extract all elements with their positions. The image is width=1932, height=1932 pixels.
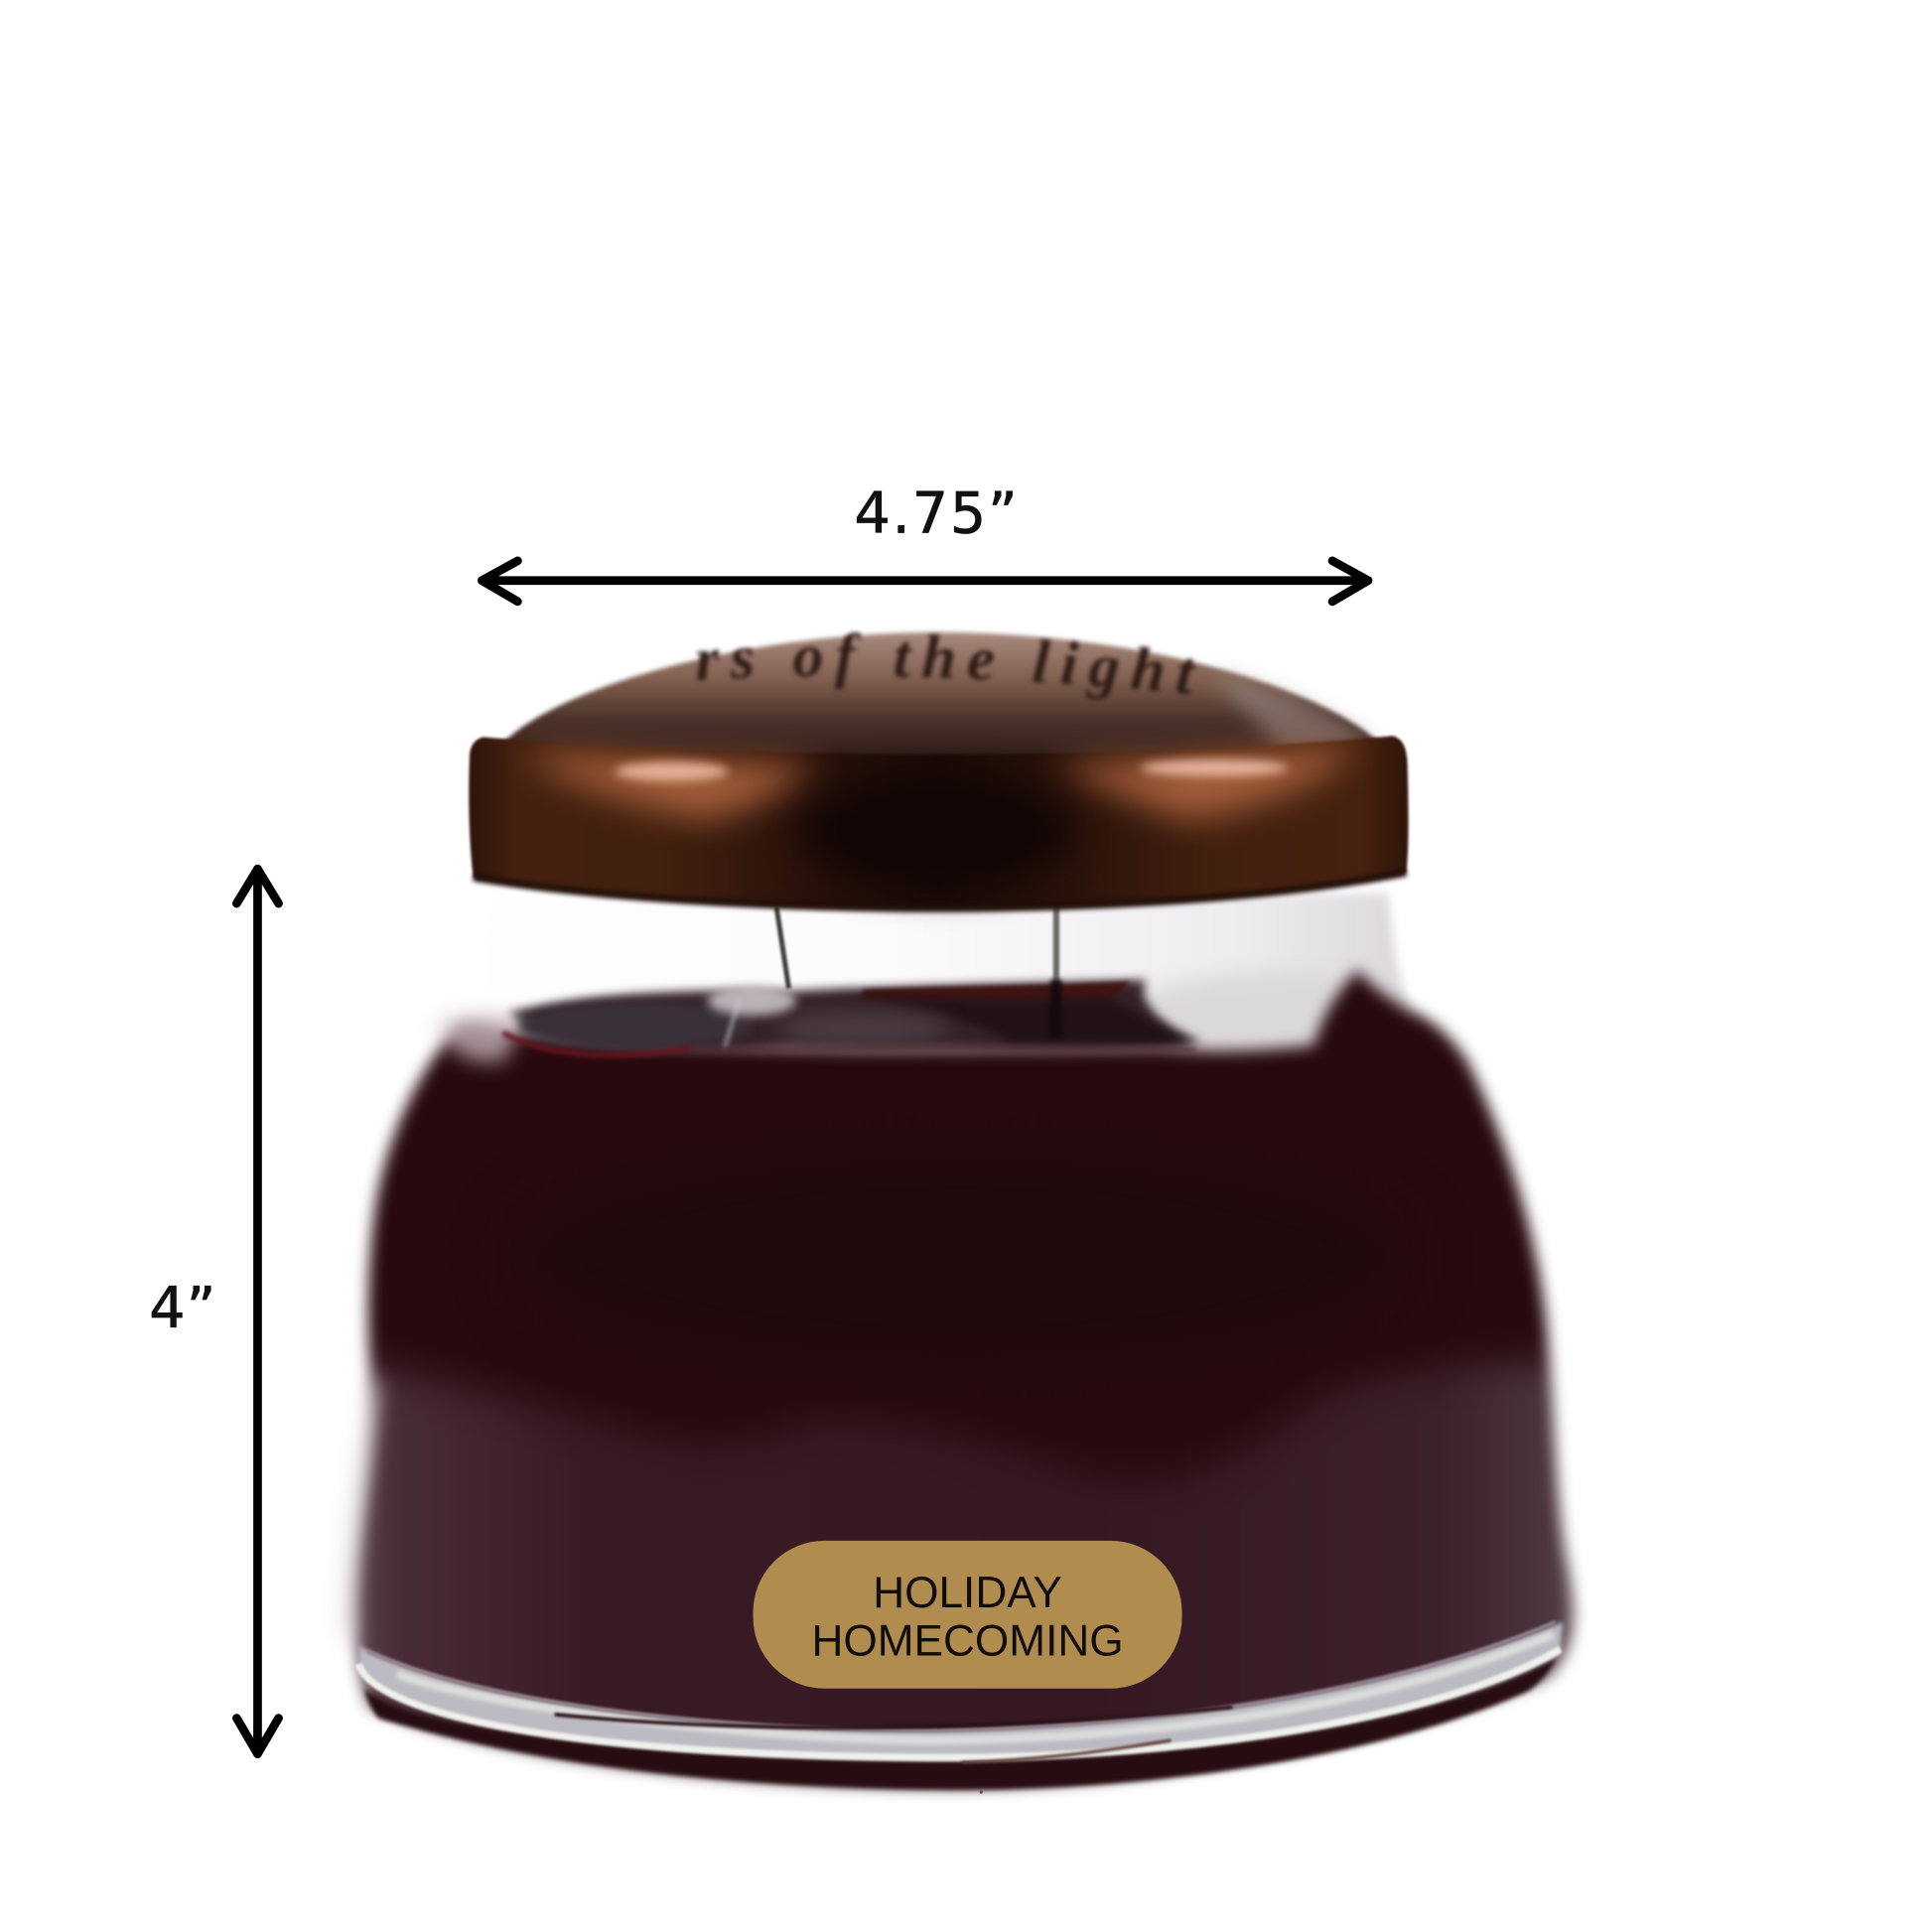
jar lid: [467, 629, 1411, 920]
wax: lower lighter layer: [344, 1331, 1585, 1799]
arrow: height dimension: [236, 869, 279, 1754]
base: outer white band: [358, 1649, 1561, 1757]
wax: upper dark layer: [321, 949, 1602, 1481]
label text: HOMECOMING: HOMECOMING: [811, 1616, 1124, 1665]
label: scent name sticker: [754, 1541, 1182, 1689]
lid: dome: [502, 629, 1378, 757]
jar: glass neck: [419, 894, 1454, 1084]
jar: glass base: [358, 1622, 1563, 1794]
wax top surface: [434, 980, 1201, 1062]
width label: 4.75”: [855, 481, 1020, 546]
infographic: candle jar with dimensions: [151, 490, 1585, 1799]
arrow: width dimension: [482, 561, 1368, 602]
base: wax lower edge line: [367, 1622, 1556, 1730]
jar: wax body: [321, 949, 1602, 1800]
lid: rim highlights: [524, 752, 820, 820]
lid: copper rim: [469, 736, 1409, 908]
wax: pale hazy edge: [349, 1380, 374, 1639]
lid: embossed lettering: rs of the light: [694, 629, 1197, 701]
height label: 4”: [149, 1276, 217, 1341]
base: inner light band: [397, 1634, 1553, 1740]
base: glass fill between wax edge and rim: [358, 1622, 1563, 1760]
label text: HOLIDAY: HOLIDAY: [873, 1569, 1062, 1617]
base: dark shadow under glass: [364, 1658, 1556, 1790]
wicks: [776, 907, 1056, 1037]
